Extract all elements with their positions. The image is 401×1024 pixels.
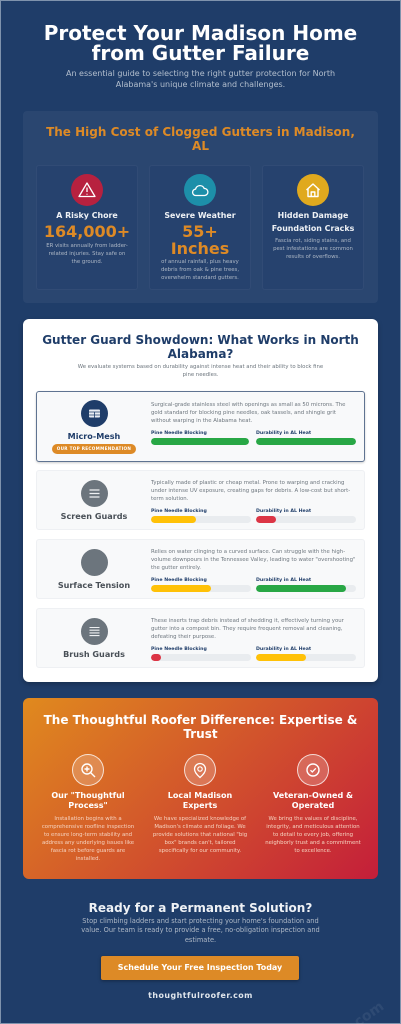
feature description: specifically for our community.: [159, 848, 241, 854]
guard name: Micro-Mesh: [68, 431, 120, 441]
card: surface tension: [36, 539, 365, 599]
description: volume downpours in the Tennessee Valley, leading to water "overshooting": [151, 557, 355, 563]
feature description: address any underlying issues like: [42, 840, 134, 846]
feature description: provide solutions that national "big: [153, 832, 247, 838]
stat number: Inches: [171, 238, 229, 258]
card description: [161, 259, 239, 281]
stat number: [171, 222, 229, 258]
card: micro-mesh: [36, 391, 365, 462]
icon: surface tension: [81, 549, 108, 576]
section heading: Alabama?: [168, 347, 233, 361]
section subheading: [78, 364, 323, 378]
panel: the thoughtful roofer difference: [23, 698, 378, 879]
description: term solution.: [151, 496, 188, 502]
description: Relies on water clinging to a curved surface. Can struggle with the high-: [151, 549, 345, 555]
feature: thoughtful process: [42, 754, 134, 862]
card title: A Risky Chore: [56, 211, 118, 220]
description: [151, 618, 344, 640]
header: [44, 21, 357, 89]
rating: durability: Durability in AL Heat: [256, 431, 311, 436]
feature description: to excellence.: [294, 848, 332, 854]
badge: top recommendation: [52, 444, 136, 454]
stat number: 55+: [182, 222, 218, 241]
rating: pine needle blocking: Pine Needle Blocking: [151, 431, 207, 436]
icon: screen: [81, 480, 108, 507]
icon: map pin: [184, 754, 216, 786]
feature description: We have specialized knowledge of: [154, 816, 246, 822]
description: [151, 402, 346, 424]
feature description: neighborly trust and a commitment: [265, 840, 361, 846]
card description: overwhelm standard gutters.: [161, 275, 239, 281]
feature description: Installation begins with a: [54, 816, 122, 822]
description: Typically made of plastic or cheap metal. Prone to warping and cracking: [151, 480, 344, 486]
title: Protect Your Madison Home: [44, 21, 357, 45]
feature title: [273, 790, 353, 810]
card: screen guards: [36, 470, 365, 530]
icon: mesh: [81, 400, 108, 427]
cta heading: Ready for a Permanent Solution?: [89, 900, 312, 914]
feature description: to ensure long-term stability and: [44, 832, 132, 838]
subtitle: [66, 69, 335, 89]
feature title: [168, 790, 232, 810]
feature description: [42, 816, 134, 862]
rating: pine needle blocking: Pine Needle Blocking: [151, 509, 207, 514]
stat card: severe weather: [149, 165, 251, 290]
rating: durability: Durability in AL Heat: [256, 578, 311, 583]
title: [44, 21, 357, 65]
feature description: comprehensive roofline inspection: [42, 824, 134, 830]
cta button: [101, 956, 299, 980]
feature description: installed.: [76, 856, 100, 862]
rating: pine needle blocking: Pine Needle Blocking: [151, 578, 207, 583]
icon: warning triangle: [71, 174, 103, 206]
panel heading: [44, 713, 357, 740]
rating: durability: [256, 430, 356, 445]
description: Surgical-grade stainless steel with openings as small as 50 microns. The: [151, 402, 345, 408]
card: brush guards: [36, 608, 365, 668]
rating: durability: Durability in AL Heat: [256, 647, 311, 652]
cta button: Schedule Your Free Inspection Today: [118, 963, 282, 972]
feature description: to detail to every job, offering: [273, 832, 353, 838]
cta text: estimate.: [185, 936, 216, 944]
feature description: box" brands can't, tailored: [164, 840, 236, 846]
feature description: integrity, and meticulous attention: [266, 824, 360, 830]
guard name: Screen Guards: [61, 511, 127, 521]
description: under intense UV exposure, creating gaps for debris. A low-cost but short-: [151, 488, 350, 494]
card description: the ground.: [71, 259, 103, 265]
panel heading: The Thoughtful Roofer Difference: Expertise &: [44, 713, 357, 727]
description: [151, 549, 355, 571]
rating: pine needle blocking: [151, 430, 249, 445]
card description: results of overflows.: [286, 254, 340, 260]
card description: related injuries. Stay safe on: [49, 251, 125, 257]
card description: of annual rainfall, plus heavy: [161, 259, 239, 265]
feature title: Experts: [183, 801, 217, 810]
feature description: fascia rot before guards are: [51, 848, 125, 854]
panel heading: AL: [192, 138, 209, 152]
card description: ER visits annually from ladder-: [46, 243, 128, 249]
feature title: Process": [68, 801, 108, 810]
icon: magnifier: [72, 754, 104, 786]
feature: local experts: [153, 754, 247, 854]
cta text: [0, 917, 401, 945]
stat number: 164,000+: [44, 222, 130, 241]
description: without warping in the Alabama heat.: [151, 418, 252, 424]
card title: [272, 211, 354, 233]
stat card: a risky chore: [36, 165, 138, 290]
feature title: [51, 790, 125, 810]
panel: high cost of clogged gutters: [23, 111, 378, 303]
feature: veteran-owned: [265, 754, 361, 854]
description: defeating their purpose.: [151, 634, 216, 640]
description: gutter into a compost bin. They require frequent removal and cleaning,: [151, 626, 342, 632]
description: the gutter entirely.: [151, 565, 201, 571]
feature description: Madison's climate and foliage. We: [154, 824, 246, 830]
guard name: Brush Guards: [63, 649, 125, 659]
rating: durability: [256, 578, 356, 592]
icon: brush: [81, 618, 108, 645]
card description: Fascia rot, siding stains, and: [275, 238, 351, 244]
feature title: Our "Thoughtful: [51, 790, 125, 800]
feature description: We bring the values of discipline,: [268, 816, 357, 822]
card description: [273, 238, 353, 260]
rating: pine needle blocking: Pine Needle Blocking: [151, 647, 207, 652]
website link: thoughtfulroofer.com: [148, 991, 253, 1000]
card description: [46, 243, 128, 265]
cta text: Stop climbing ladders and start protecting your home's foundation and: [82, 917, 319, 925]
feature title: Operated: [292, 801, 334, 810]
guard name: Surface Tension: [58, 580, 130, 590]
icon: house: [297, 174, 329, 206]
icon: cloud: [184, 174, 216, 206]
panel heading: The High Cost of Clogged Gutters in Madison,: [46, 124, 355, 138]
description: gold standard for blocking pine needles, oak tassels, and shingle grit: [151, 410, 336, 416]
card description: pest infestations are common: [273, 246, 353, 252]
rating: pine needle blocking: [151, 646, 251, 661]
rating: pine needle blocking: [151, 508, 251, 523]
description: [151, 480, 350, 502]
card title: Hidden Damage: [278, 211, 348, 220]
feature title: Veteran-Owned &: [273, 790, 353, 800]
subtitle: Alabama's unique climate and challenges.: [116, 80, 285, 89]
feature title: Local Madison: [168, 790, 232, 800]
description: These inserts trap debris instead of shedding it, effectively turning your: [151, 618, 344, 624]
panel heading: Trust: [183, 726, 218, 740]
section heading: [42, 333, 359, 361]
subtitle: An essential guide to selecting the right gutter protection for North: [66, 69, 335, 78]
section heading: Gutter Guard Showdown: What Works in North: [42, 333, 359, 347]
feature description: [265, 816, 361, 854]
card title: Severe Weather: [164, 211, 236, 220]
rating: durability: [256, 646, 356, 661]
stat card: hidden damage: [262, 165, 364, 290]
cta text: value. Our team is ready to provide a free, no-obligation inspection and: [81, 926, 320, 934]
panel: gutter guard showdown: [23, 319, 378, 682]
rating: durability: [256, 508, 356, 523]
card description: debris from oak & pine trees,: [161, 267, 239, 273]
feature description: [153, 816, 247, 854]
rating: pine needle blocking: [151, 578, 251, 592]
title: from Gutter Failure: [92, 41, 309, 65]
call to action: [0, 898, 401, 1003]
card title: Foundation Cracks: [272, 224, 354, 233]
section subheading: We evaluate systems based on durability against intense heat and their ability to block fine: [78, 364, 323, 370]
section subheading: pine needles.: [183, 372, 218, 378]
badge: top recommendation: OUR TOP RECOMMENDATION: [57, 446, 131, 451]
rating: durability: Durability in AL Heat: [256, 509, 311, 514]
icon: check badge: [297, 754, 329, 786]
panel heading: [46, 124, 355, 152]
